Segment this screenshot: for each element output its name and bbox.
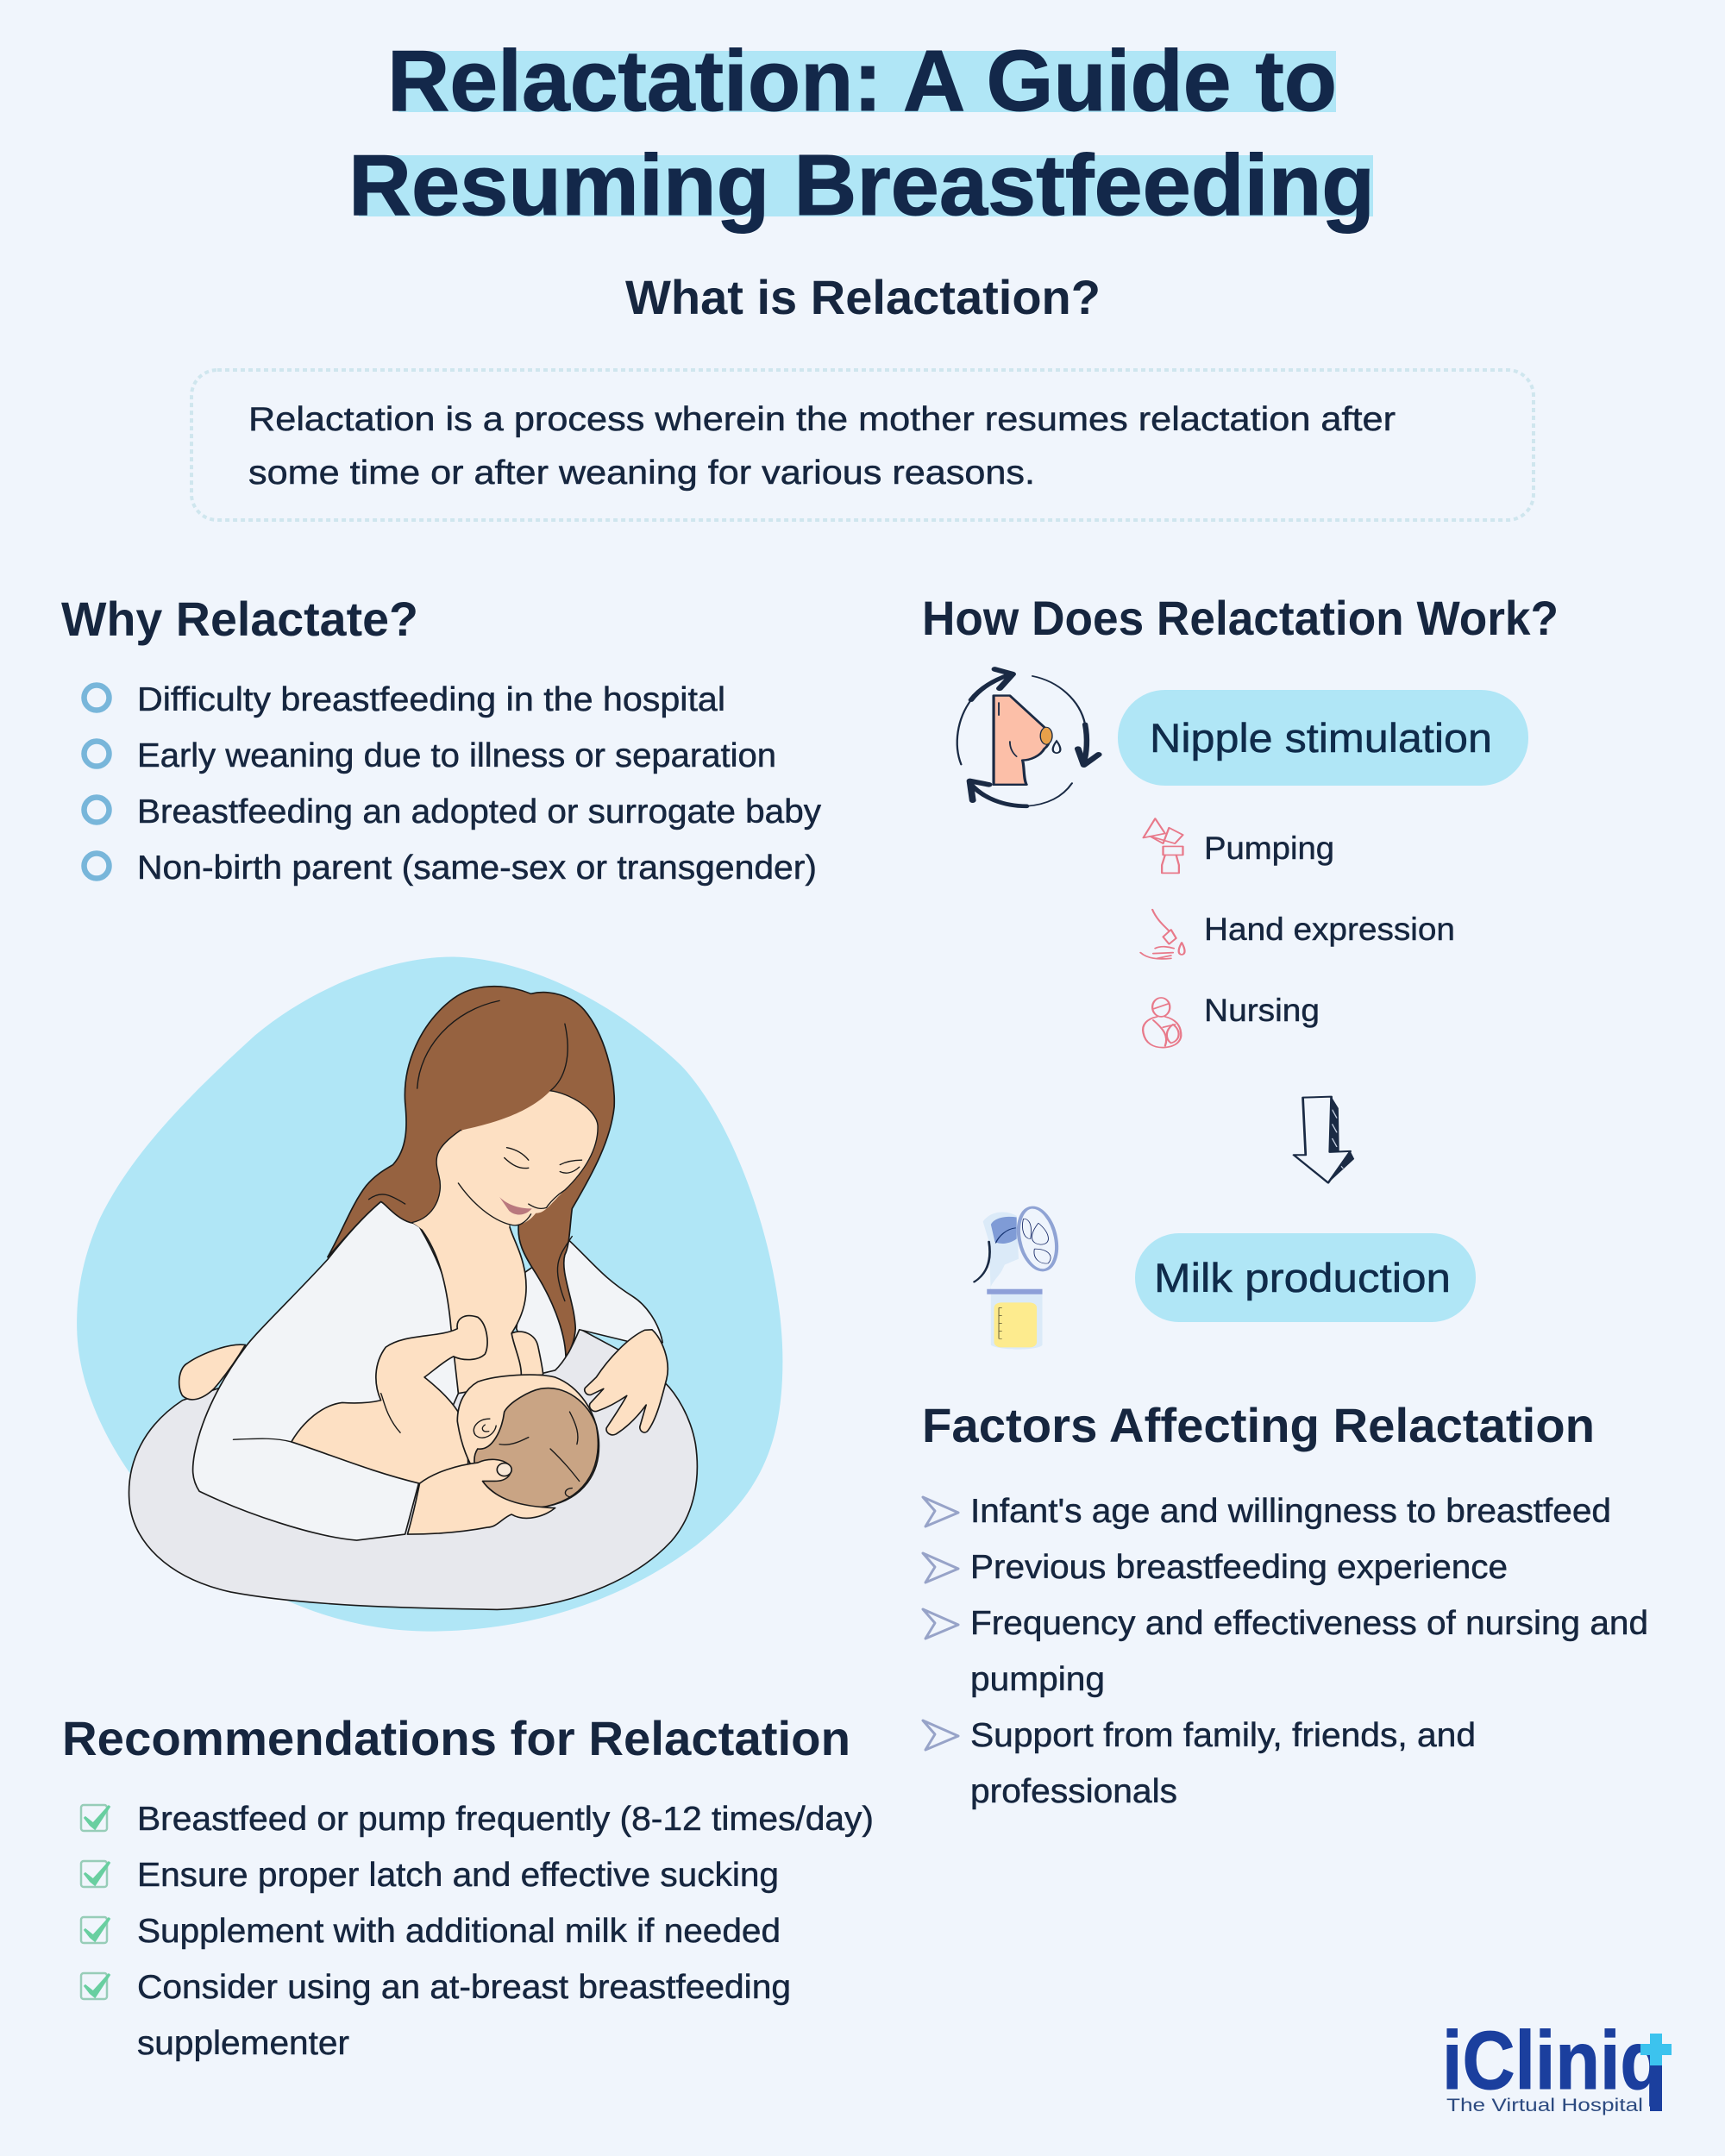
panel: definition callout: some time or after weaning for various reasons. bbox=[248, 454, 1035, 492]
panel: definition callout bbox=[191, 370, 1534, 520]
icon: nursing mother bbox=[1143, 998, 1181, 1048]
label: nursing: Nursing bbox=[1204, 993, 1320, 1028]
list: factors: Infant's age and willingness to breastfeed bbox=[970, 1493, 1611, 1530]
baby hair bbox=[474, 1388, 598, 1507]
check icons bbox=[81, 1805, 110, 1999]
heading: factors affecting relactation: Factors Affecting Relactation bbox=[922, 1398, 1595, 1452]
neck bbox=[412, 1130, 511, 1230]
list: reasons to relactate: Non-birth parent (same-sex or transgender) bbox=[137, 849, 817, 887]
icon: milk pump bottle bbox=[975, 1206, 1062, 1350]
hair bbox=[328, 987, 614, 1357]
list: reasons to relactate: Early weaning due to illness or separation bbox=[137, 737, 776, 774]
icon: breast pump bbox=[1144, 818, 1182, 873]
icon: hand expression bbox=[1140, 910, 1185, 959]
list: recommendations: supplementer bbox=[137, 2025, 349, 2062]
label: hand expression: Hand expression bbox=[1204, 912, 1455, 947]
pill: nipple stimulation bbox=[1118, 690, 1528, 786]
baby leg bbox=[179, 1344, 245, 1400]
arrow: down sketch arrow bbox=[1294, 1097, 1354, 1183]
heading: why relactate: Why Relactate? bbox=[61, 592, 418, 646]
list: recommendations: Ensure proper latch and effective sucking bbox=[137, 1857, 779, 1894]
title: Relactation: A Guide to bbox=[387, 33, 1337, 129]
pill: nipple stimulation: Nipple stimulation bbox=[1150, 715, 1492, 761]
heading: recommendations: Recommendations for Relactation bbox=[62, 1711, 850, 1765]
illustration: mother breastfeeding baby bbox=[77, 956, 782, 1632]
face bbox=[456, 1091, 598, 1225]
list: factors: Support from family, friends, and bbox=[970, 1717, 1476, 1754]
shirt left bbox=[193, 1201, 458, 1540]
panel: definition callout: Relactation is a process wherein the mother resumes relactation after bbox=[248, 401, 1396, 438]
mother's supporting hand bbox=[407, 1459, 555, 1534]
list: recommendations: Supplement with additional milk if needed bbox=[137, 1913, 781, 1950]
mother's right hand bbox=[585, 1330, 668, 1435]
chest bbox=[420, 1225, 536, 1394]
label: pumping: Pumping bbox=[1204, 830, 1334, 866]
list: reasons to relactate bbox=[85, 681, 822, 887]
baby head bbox=[457, 1375, 599, 1507]
nursing pillow bbox=[129, 1329, 697, 1609]
heading: what is relactation: What is Relactation? bbox=[625, 270, 1101, 324]
list: recommendations: Consider using an at-breast breastfeeding bbox=[137, 1969, 791, 2006]
baby ear and hair lines bbox=[381, 1394, 580, 1497]
icon: breast with circular arrows bbox=[957, 669, 1099, 806]
blue blob background bbox=[77, 956, 782, 1632]
list: factors: professionals bbox=[970, 1773, 1177, 1810]
pill: milk production bbox=[1135, 1233, 1476, 1322]
pill: milk production: Milk production bbox=[1154, 1255, 1451, 1300]
list: factors: Previous breastfeeding experience bbox=[970, 1549, 1508, 1586]
shirt right bbox=[517, 1241, 662, 1375]
logo: iCliniq: The Virtual Hospital bbox=[1446, 2095, 1643, 2115]
list: recommendations: Breastfeed or pump frequently (8-12 times/day) bbox=[137, 1801, 874, 1838]
baby body bbox=[292, 1316, 487, 1483]
shirt fold bbox=[233, 1438, 292, 1442]
baby arm raised at breast bbox=[511, 1332, 543, 1375]
facial features bbox=[369, 1000, 598, 1301]
list: factors: pumping bbox=[970, 1661, 1105, 1698]
list: reasons to relactate: Breastfeeding an adopted or surrogate baby bbox=[137, 793, 822, 830]
heading: how does relactation work: How Does Relactation Work? bbox=[922, 591, 1559, 645]
logo: iCliniq: iCliniq bbox=[1442, 2015, 1665, 2107]
list: reasons to relactate: Difficulty breastfeeding in the hospital bbox=[137, 681, 725, 718]
arrow bullets bbox=[923, 1497, 958, 1750]
title bbox=[348, 33, 1375, 234]
title: Resuming Breastfeeding bbox=[348, 137, 1375, 234]
list: factors bbox=[923, 1493, 1648, 1810]
list: recommendations bbox=[81, 1801, 874, 2062]
list: factors: Frequency and effectiveness of nursing and bbox=[970, 1605, 1648, 1642]
